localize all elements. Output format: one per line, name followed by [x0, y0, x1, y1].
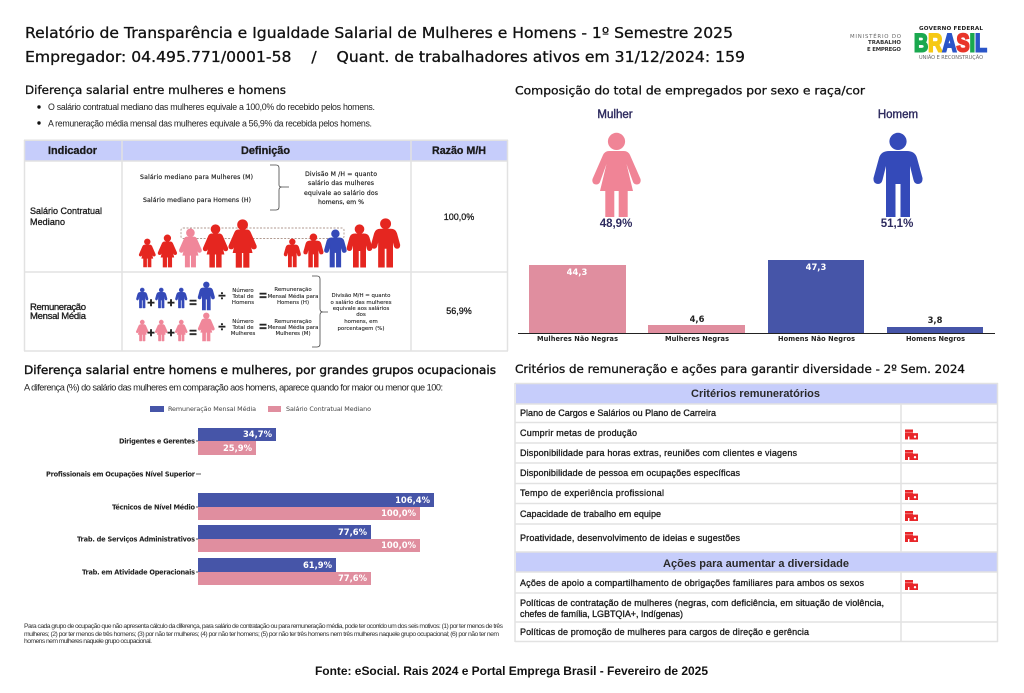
pictograma: homem: Homem — [878, 109, 918, 121]
definição: remuneração média com icones: homens, em — [344, 319, 378, 325]
bar chart: grupos ocupacionais: 77,6% — [338, 527, 368, 537]
lista de ações: Políticas de contratação de mulheres (negras, com deficiência, em situação de violência, — [520, 598, 884, 608]
nota de rodapé: Para cada grupo de ocupação que não apresenta cálculo da diferença, para salário de contratação ou para remuneração média, pode ter ocorrido um dos seis motivos: (1) por ter menos de três — [24, 623, 504, 630]
row label: salário contratual mediano: Salário Contratual — [30, 206, 102, 216]
pictograma: mulher: 48,9% — [600, 218, 632, 230]
definição: remuneração média com icones — [136, 276, 392, 347]
bar chart: grupos ocupacionais: 77,6% — [338, 573, 368, 583]
bullet list: resumo: A remuneração média mensal das mulheres equivale a 56,9% da recebida pelos homens. — [48, 118, 372, 128]
definição: remuneração média com icones: ÷ — [218, 319, 226, 334]
lista de critérios: Plano de Cargos e Salários ou Plano de Carreira — [520, 408, 716, 418]
bar chart: composição por raça/cor: 3,8 — [928, 315, 943, 325]
row label: remuneração mensal média — [30, 302, 87, 322]
bar chart: grupos ocupacionais: Trab. de Serviços Administrativos — [77, 536, 195, 544]
bar chart: grupos ocupacionais: 100,0% — [381, 540, 417, 550]
cabeçalho: ações para aumentar a diversidade: Ações para aumentar a diversidade — [663, 558, 849, 570]
cabeçalho: critérios remuneratórios: Critérios remuneratórios — [691, 388, 820, 400]
definição: remuneração média com icones: = — [259, 319, 267, 334]
lista de critérios: Disponibilidade para horas extras, reuniões com clientes e viagens — [520, 448, 798, 458]
bar chart: grupos ocupacionais — [46, 428, 434, 585]
panel: tabela de indicadores — [24, 140, 508, 351]
definição: remuneração média com icones: dos — [356, 312, 366, 318]
definição: salário mediano: Divisão M /H = quanto — [305, 171, 377, 178]
bar chart: grupos ocupacionais: Trab. em Atividade Operacionais — [82, 568, 195, 576]
valor: razão remuneração média: 56,9% — [446, 306, 472, 316]
lista de critérios: Cumprir metas de produção — [520, 428, 637, 438]
row label: salário contratual mediano — [30, 206, 102, 227]
bar chart: grupos ocupacionais: Profissionais em Ocupações Nível Superior — [46, 470, 196, 478]
heading: composição: Composição do total de empregados por sexo e raça/cor — [515, 84, 865, 98]
row label: salário contratual mediano: Mediano — [30, 217, 65, 227]
panel: tabela de indicadores: Definição — [241, 145, 290, 157]
lista de ações: Ações de apoio a compartilhamento de obrigações familiares para ambos os sexos — [520, 578, 864, 588]
heading: critérios: Critérios de remuneração e ações para garantir diversidade - 2º Sem. 2024 — [515, 362, 965, 376]
definição: remuneração média com icones: equivale aos salários — [333, 305, 389, 312]
bar chart: composição por raça/cor: Mulheres Negras — [665, 335, 729, 343]
definição: salário mediano: homens, em % — [318, 199, 364, 206]
definição: remuneração média com icones: Total de — [231, 294, 254, 300]
definição: remuneração média com icones: Mulheres (M) — [275, 331, 311, 337]
definição: remuneração média com icones: Mulheres — [231, 331, 255, 337]
bar chart: grupos ocupacionais: 100,0% — [381, 508, 417, 518]
bar chart: composição por raça/cor: 44,3 — [567, 267, 588, 277]
bar chart: grupos ocupacionais: 61,9% — [303, 560, 333, 570]
bar chart: composição por raça/cor: Homens Não Negros — [778, 335, 855, 343]
icones: critérios adotados — [905, 430, 918, 590]
definição: remuneração média com icones: Número — [232, 287, 254, 294]
pictograma: homem: 51,1% — [881, 218, 913, 230]
definição: remuneração média com icones: Homens — [232, 300, 254, 306]
bar chart: composição por raça/cor: 4,6 — [690, 314, 705, 324]
logo: ministério e governo federal: GOVERNO FEDERAL — [919, 26, 983, 32]
icones: distribuição salarial mulheres e homens — [139, 219, 400, 267]
definição: salário mediano: Salário mediano para Homens (H) — [143, 196, 251, 204]
fonte: Fonte: eSocial. Rais 2024 e Portal Emprega Brasil - Fevereiro de 2025 — [315, 664, 708, 678]
logo: ministério e governo federal: BRASIL — [914, 30, 987, 58]
bar chart: composição por raça/cor: Mulheres Não Negras — [537, 335, 618, 343]
lista de critérios: Disponibilidade de pessoa em ocupações específicas — [520, 468, 740, 478]
lista de critérios — [520, 408, 798, 543]
definição: salário mediano: equivale ao salário dos — [304, 189, 378, 197]
definição: remuneração média com icones: = — [189, 325, 197, 340]
definição: salário mediano — [140, 165, 378, 210]
title: Empregador: 04.495.771/0001-58 / Quant. de trabalhadores ativos em 31/12/2024: 159 — [25, 48, 745, 66]
panel: critérios e ações — [515, 383, 998, 642]
lista de critérios: Proatividade, desenvolvimento de ideias e sugestões — [520, 533, 740, 543]
nota de rodapé — [24, 623, 504, 645]
lista de critérios: Tempo de experiência profissional — [520, 488, 664, 498]
heading: diferença por grupos ocupacionais: Diferença salarial entre homens e mulheres, por grandes grupos ocupacionais — [24, 363, 496, 377]
lista de ações: Políticas de promoção de mulheres para cargos de direção e gerência — [520, 627, 809, 637]
bar chart: grupos ocupacionais: 25,9% — [223, 443, 253, 453]
lista de ações — [520, 578, 884, 637]
lista de ações: chefes de família, LGBTQIA+, Indígenas) — [520, 609, 683, 619]
panel: tabela de indicadores: Razão M/H — [432, 145, 486, 157]
bar chart: grupos ocupacionais: 34,7% — [243, 429, 273, 439]
nota de rodapé: homens nem mulheres naquele grupo ocupacional. — [24, 638, 152, 645]
definição: remuneração média com icones: Total de — [231, 325, 254, 331]
definição: remuneração média com icones: + — [147, 295, 155, 310]
legenda: Remuneração Mensal Média — [168, 405, 256, 413]
logo: ministério e governo federal — [850, 26, 987, 61]
title: Relatório de Transparência e Igualdade Salarial de Mulheres e Homens - 1º Semestre 2025 — [25, 24, 733, 42]
bullet list: resumo — [37, 102, 375, 128]
title — [25, 24, 745, 66]
bar chart: composição por raça/cor: Homens Negros — [906, 335, 965, 343]
pictograma: mulher — [592, 109, 641, 230]
bar chart: composição por raça/cor: 47,3 — [806, 262, 827, 272]
pictograma: mulher: Mulher — [597, 109, 633, 121]
bar chart: composição por raça/cor — [518, 260, 995, 343]
bar chart: grupos ocupacionais: Técnicos de Nível Médio — [112, 504, 195, 512]
row label: remuneração mensal média: Remuneração — [30, 302, 86, 313]
definição: remuneração média com icones: + — [147, 325, 155, 340]
logo: ministério e governo federal: UNIÃO E RECONSTRUÇÃO — [919, 54, 983, 61]
definição: remuneração média com icones: ÷ — [218, 288, 226, 303]
definição: salário mediano: Salário mediano para Mulheres (M) — [140, 173, 253, 181]
pictograma: homem — [873, 109, 923, 230]
logo: ministério e governo federal: E EMPREGO — [867, 47, 901, 53]
valor: razão salário mediano: 100,0% — [444, 212, 474, 222]
logo: ministério e governo federal: MINISTÉRIO DO — [850, 32, 901, 40]
lista de critérios: Capacidade de trabalho em equipe — [520, 509, 661, 519]
subtítulo do gráfico: A diferença (%) do salário das mulheres em comparação aos homens, aparece quando for maior ou menor que 100: — [24, 382, 443, 392]
logo: ministério e governo federal: TRABALHO — [868, 40, 901, 46]
definição: remuneração média com icones: porcentagem (%) — [338, 326, 384, 332]
bar chart: grupos ocupacionais: 106,4% — [395, 495, 431, 505]
definição: remuneração média com icones: Remuneração — [274, 287, 312, 293]
bullet list: resumo: O salário contratual mediano das mulheres equivale a 100,0% do recebido pelos homens. — [48, 102, 375, 112]
definição: remuneração média com icones: Número — [232, 318, 254, 325]
definição: remuneração média com icones: Divisão M/H = quanto — [332, 293, 390, 299]
definição: remuneração média com icones: = — [189, 295, 197, 310]
definição: remuneração média com icones: o salário das mulheres — [330, 299, 392, 306]
definição: remuneração média com icones: Mensal Média para — [268, 293, 318, 300]
definição: remuneração média com icones: Remuneração — [274, 319, 312, 325]
panel: tabela de indicadores: Indicador — [48, 145, 98, 157]
definição: remuneração média com icones: Homens (H) — [277, 300, 309, 306]
definição: remuneração média com icones: + — [167, 295, 175, 310]
legenda — [150, 405, 371, 413]
nota de rodapé: mulheres; (2) por ter menos de três homens; (3) por não ter mulheres; (4) por não ter homens; (5) por não ter três homens nem três mulheres naquele grupo ocupacional; (6) por não ter nem — [24, 631, 499, 638]
definição: remuneração média com icones: = — [259, 288, 267, 303]
heading: diferença salarial: Diferença salarial entre mulheres e homens — [25, 83, 286, 97]
row label: remuneração mensal média: Mensal Média — [30, 311, 87, 322]
definição: remuneração média com icones: + — [167, 325, 175, 340]
bar chart: grupos ocupacionais: Dirigentes e Gerentes — [119, 438, 195, 446]
legenda: Salário Contratual Mediano — [286, 405, 371, 413]
definição: remuneração média com icones: Mensal Média para — [268, 324, 318, 331]
definição: salário mediano: salário das mulheres — [308, 179, 374, 187]
